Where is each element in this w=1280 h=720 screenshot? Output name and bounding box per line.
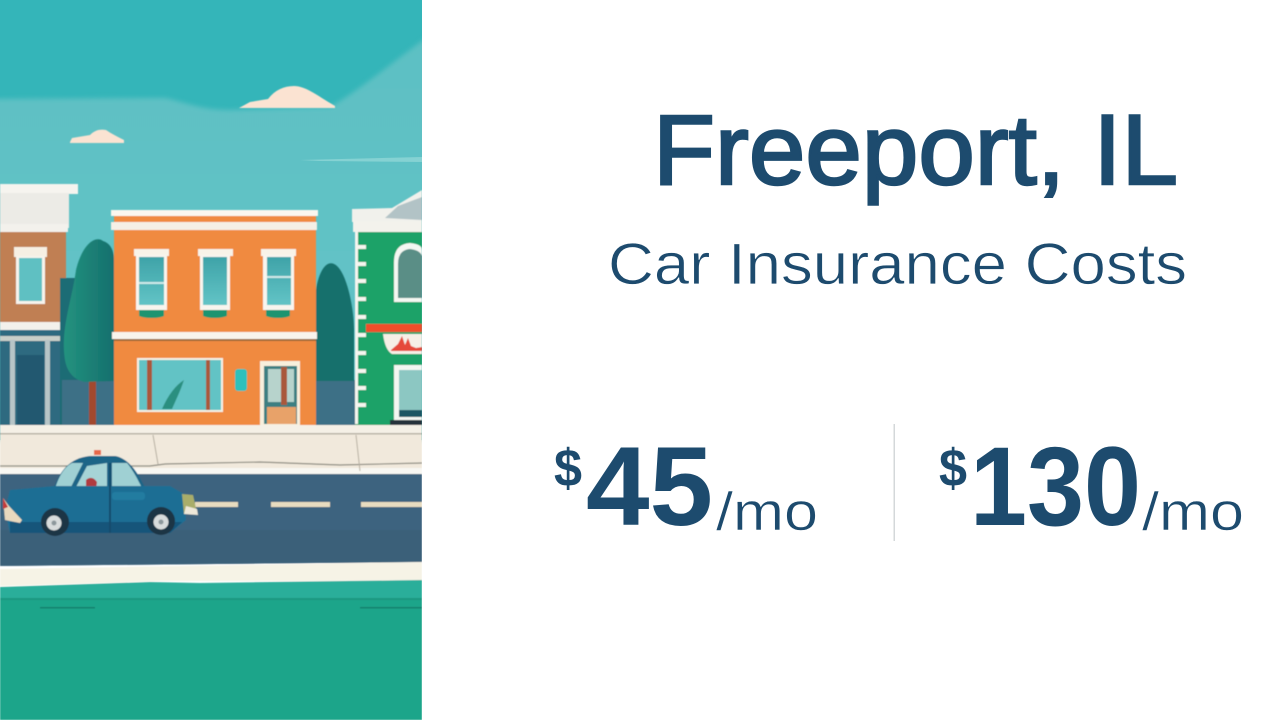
upper windows bbox=[134, 249, 296, 318]
wall sign bbox=[235, 369, 247, 391]
rear wheel bbox=[41, 508, 69, 536]
front wheel bbox=[147, 507, 175, 535]
price: high estimate: $ bbox=[939, 439, 967, 498]
sidewalk bbox=[0, 425, 422, 475]
grass bbox=[0, 580, 422, 720]
building: central orange bbox=[111, 210, 318, 426]
building: right green bbox=[352, 190, 422, 425]
sky background bbox=[0, 0, 430, 440]
background wall and trees bbox=[60, 239, 356, 426]
lane markings bbox=[195, 502, 422, 507]
panel: illustrated street scene bbox=[0, 0, 430, 720]
building: left brown storefront bbox=[0, 184, 78, 426]
price: high estimate bbox=[939, 424, 1244, 549]
icon: blue car bbox=[3, 450, 198, 536]
price: high estimate: 130 bbox=[970, 424, 1141, 549]
price: high estimate: /mo bbox=[1142, 482, 1244, 542]
rear light and bumper bbox=[3, 498, 22, 523]
title: Freeport, IL bbox=[653, 94, 1178, 205]
shop window bbox=[137, 358, 223, 412]
divider bbox=[894, 424, 895, 541]
price: low estimate bbox=[554, 424, 818, 549]
lower curb bbox=[0, 562, 422, 586]
front light bbox=[182, 494, 197, 514]
lower window bbox=[390, 365, 422, 425]
road bbox=[0, 474, 422, 566]
price: low estimate: $ bbox=[554, 439, 582, 498]
icon: small cloud bbox=[70, 130, 124, 143]
price: low estimate: /mo bbox=[716, 482, 818, 542]
icon: large cloud bbox=[239, 86, 335, 108]
arched window bbox=[394, 243, 422, 302]
red shop sign bbox=[366, 324, 422, 354]
subtitle: Car Insurance Costs bbox=[608, 232, 1187, 297]
price: low estimate: 45 bbox=[586, 424, 713, 549]
brick quoins bbox=[355, 245, 366, 407]
door bbox=[260, 361, 300, 426]
